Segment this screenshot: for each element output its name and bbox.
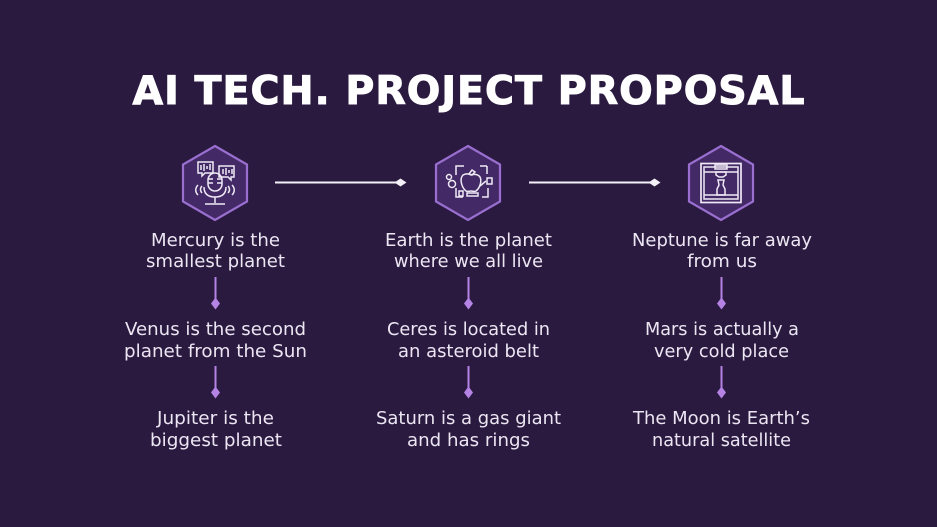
column one (124, 230, 307, 451)
text: where we all live: where we all live (394, 251, 543, 272)
connector (211, 366, 220, 398)
connector (211, 277, 220, 310)
text: Saturn: Saturn is a gas giant (376, 408, 561, 429)
arrow: step two to step three (529, 178, 660, 186)
icon: apple scan in hexagon (436, 146, 500, 220)
column two (376, 230, 561, 451)
text: biggest planet: biggest planet (150, 430, 282, 451)
text: natural satellite: natural satellite (652, 430, 791, 451)
text: Mars: Mars is actually a (645, 319, 799, 340)
text: from us: from us (687, 251, 757, 272)
text: Earth: Earth is the planet (385, 230, 552, 251)
text: very cold place: very cold place (654, 341, 789, 362)
text: The Moon: The Moon is Earth’s (632, 408, 810, 429)
column three (632, 230, 812, 451)
text: Venus: Venus is the second (125, 319, 306, 340)
icon: 3D printer in hexagon (689, 146, 753, 220)
connector (464, 277, 473, 310)
connector (717, 366, 726, 398)
text: smallest planet: smallest planet (146, 251, 285, 272)
text: planet from the Sun: planet from the Sun (124, 341, 307, 362)
connector (464, 366, 473, 398)
icon: microphone with speech bubbles in hexagon (183, 146, 247, 220)
arrow: step one to step two (275, 178, 406, 186)
text: and has rings: and has rings (407, 430, 530, 451)
text: Ceres: Ceres is located in (387, 319, 550, 340)
text: an asteroid belt: an asteroid belt (398, 341, 539, 362)
connector (717, 277, 726, 310)
title: AI TECH. PROJECT PROPOSAL (132, 68, 804, 114)
text: Jupiter: Jupiter is the (156, 408, 274, 429)
text: Neptune: Neptune is far away (632, 230, 812, 251)
text: Mercury: Mercury is the (151, 230, 280, 251)
